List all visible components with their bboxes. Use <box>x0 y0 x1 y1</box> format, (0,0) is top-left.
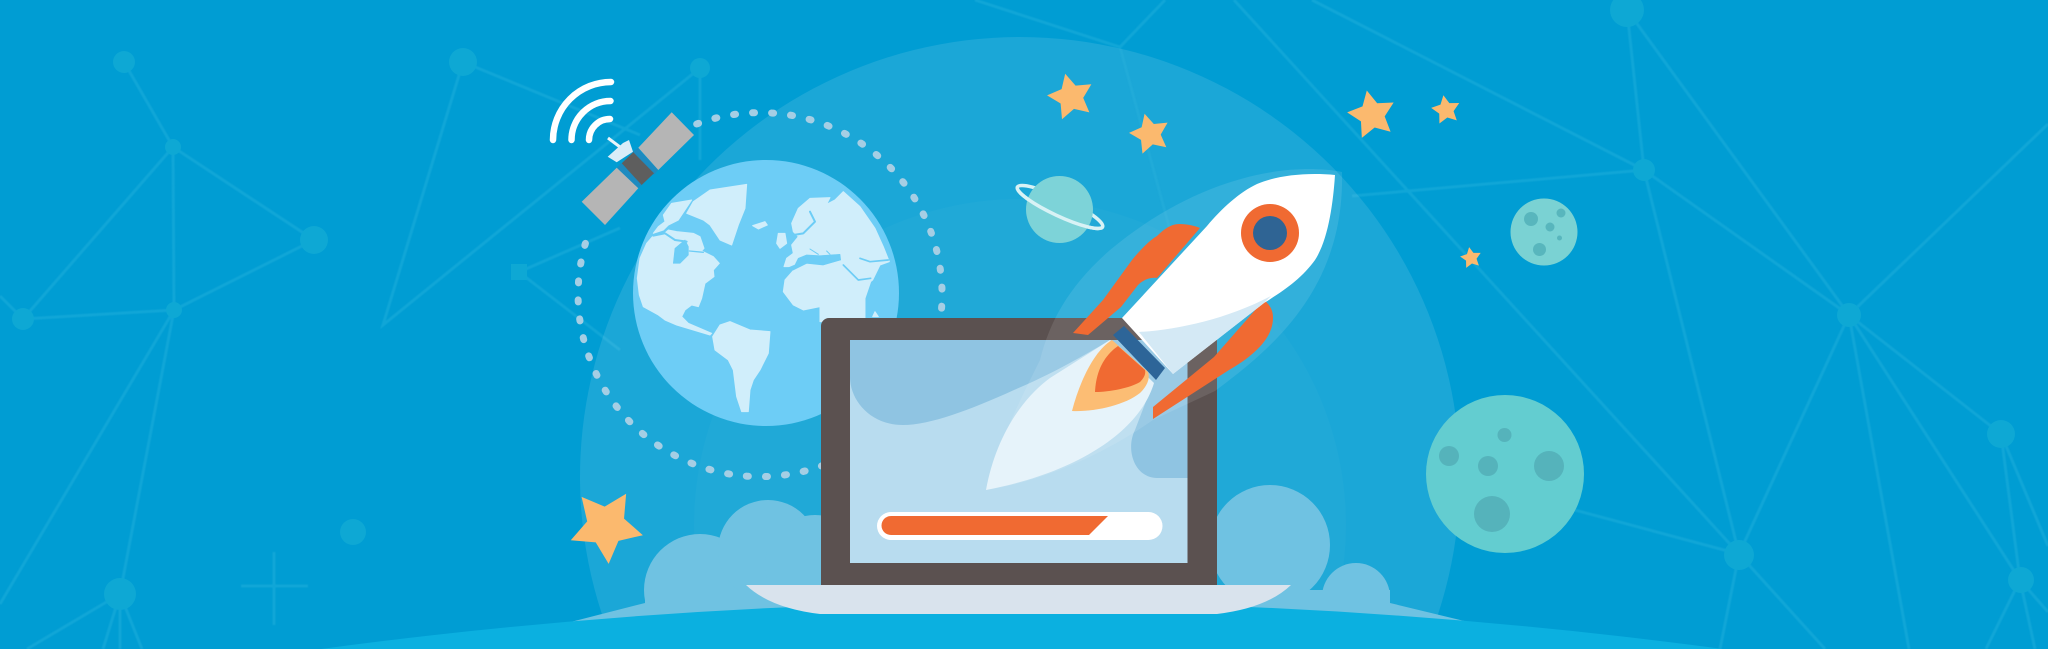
dish <box>608 140 633 162</box>
rocket <box>986 174 1335 490</box>
solar panel lower <box>582 168 638 225</box>
solar panel connector lower <box>617 163 642 188</box>
fin upper <box>1073 224 1200 335</box>
window glass <box>1253 216 1287 250</box>
ring front <box>1014 187 1103 235</box>
dome glow: inner <box>694 199 1346 640</box>
planet <box>1026 176 1093 243</box>
flame outer <box>1072 340 1149 411</box>
laptop frame <box>821 318 1217 585</box>
wifi signal arcs <box>553 82 611 140</box>
small moon <box>1510 198 1578 266</box>
hill horizon <box>321 602 1723 649</box>
rocket glow <box>986 169 1342 490</box>
stars <box>559 68 1483 571</box>
ring back <box>1014 179 1106 235</box>
flame inner <box>1095 346 1145 392</box>
solar panel connector upper <box>632 148 658 175</box>
dome glow: outer <box>580 37 1460 640</box>
body shading <box>1139 296 1271 374</box>
engine band <box>1113 326 1165 380</box>
laptop base <box>746 585 1291 614</box>
large moon <box>1426 395 1584 553</box>
progress bar fill <box>882 516 1108 535</box>
globe <box>633 160 899 426</box>
Hudson Bay and inland seas <box>653 212 888 280</box>
globe ocean <box>633 160 899 426</box>
antenna <box>608 138 620 147</box>
progress bar track <box>877 512 1162 540</box>
South America <box>713 322 770 412</box>
fin lower <box>1153 300 1273 419</box>
northern continents <box>637 184 889 335</box>
rocket body <box>1122 174 1335 374</box>
planet with ring <box>1014 176 1106 243</box>
exhaust trail <box>986 340 1154 490</box>
clouds <box>555 485 1485 646</box>
laptop screen <box>850 340 1188 563</box>
solar panel upper <box>638 112 694 170</box>
window ring <box>1241 204 1299 262</box>
orbit dotted ring <box>578 113 942 477</box>
satellite body <box>622 152 654 185</box>
screen darker blob <box>850 340 1188 478</box>
laptop <box>746 318 1291 614</box>
satellite <box>553 82 694 225</box>
